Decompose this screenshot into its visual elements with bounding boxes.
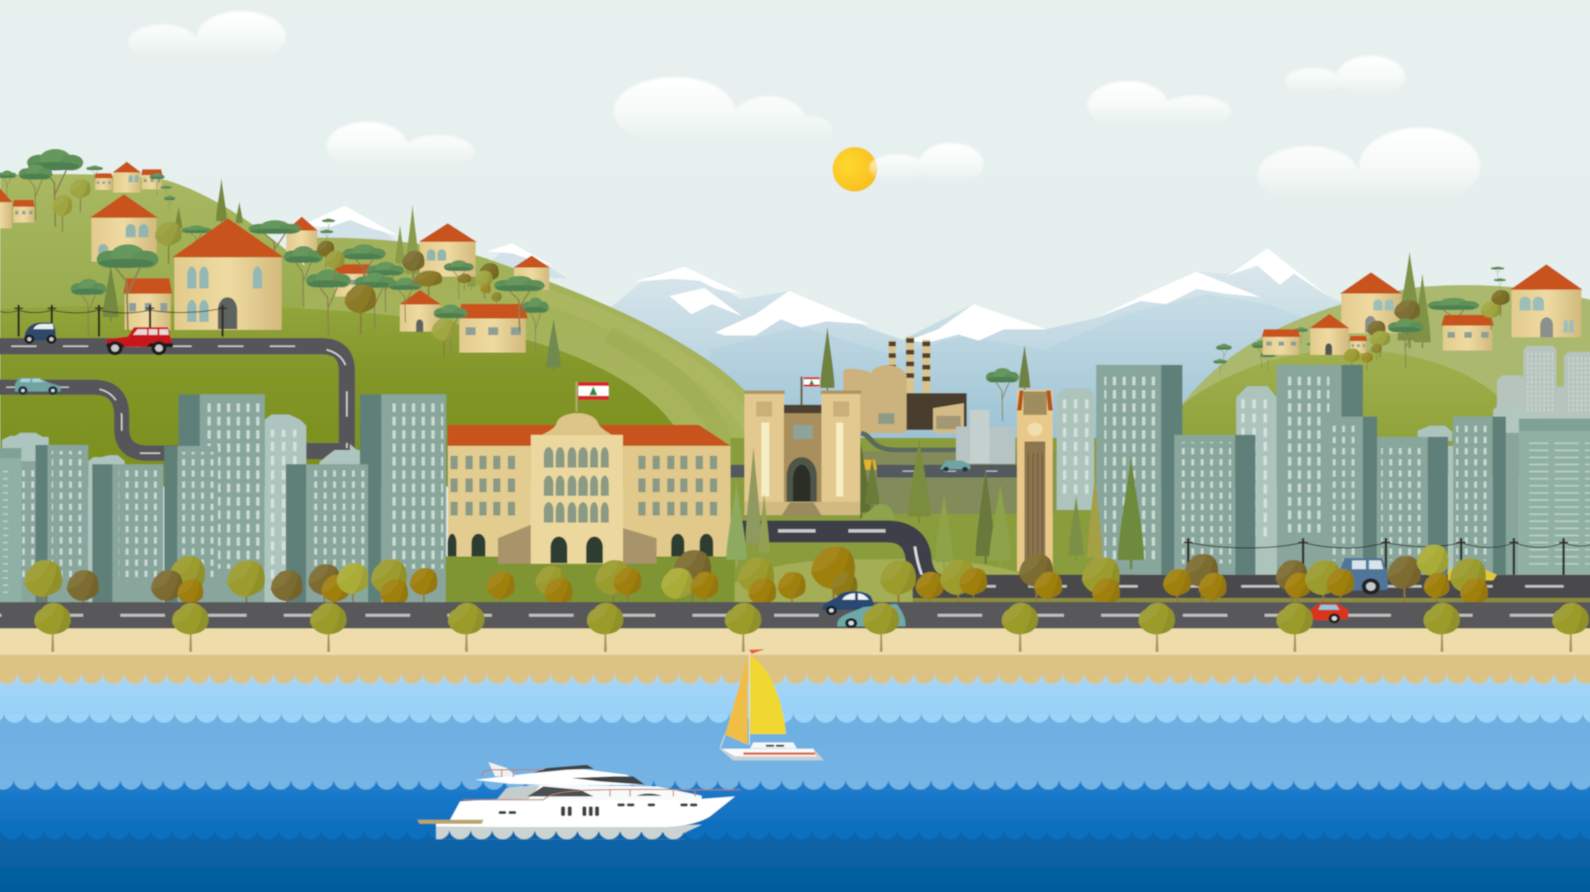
main round tower house xyxy=(71,218,284,337)
yellow car xyxy=(1448,570,1497,580)
green block tower xyxy=(0,448,21,602)
ground behind the central landmarks xyxy=(720,438,1136,605)
power line poles xyxy=(0,305,227,337)
mountains with snow caps xyxy=(302,206,1440,487)
second road on the right xyxy=(913,575,1590,602)
left hills xyxy=(0,174,791,487)
distant pale buildings on the hill xyxy=(1493,346,1590,440)
tower R3 xyxy=(1277,365,1363,575)
cars on the second road xyxy=(1312,558,1497,594)
central block with dome xyxy=(531,413,623,564)
factory halls xyxy=(843,365,967,450)
tower R2 xyxy=(1174,435,1255,575)
lower cabin xyxy=(497,785,702,800)
sailboat xyxy=(719,649,824,760)
fly bridge xyxy=(475,768,645,785)
museum main body xyxy=(744,391,861,516)
radar fin xyxy=(488,762,517,776)
small blue car xyxy=(24,323,56,344)
front coastal road xyxy=(0,602,1590,628)
side stairs xyxy=(498,525,657,564)
tower R1 xyxy=(1096,365,1182,575)
distant grey buildings xyxy=(956,410,1015,464)
sea layers xyxy=(0,673,1590,892)
firs by the right city xyxy=(1069,456,1144,569)
foreground hillside trees xyxy=(1344,290,1510,372)
tower D xyxy=(164,446,218,602)
tower R4 xyxy=(1323,417,1377,575)
back road with small car xyxy=(731,460,1017,477)
wings xyxy=(448,446,731,556)
striped chimneys xyxy=(889,337,930,393)
tower R6 xyxy=(1448,417,1506,575)
national museum xyxy=(744,377,861,516)
green lawn xyxy=(446,556,734,603)
motor yacht xyxy=(417,762,740,839)
umbrella pines behind the tower xyxy=(0,149,335,270)
sky background xyxy=(0,0,1590,487)
portholes xyxy=(499,803,697,816)
factory complex xyxy=(731,327,1050,586)
hull scalloped waterline xyxy=(436,829,685,839)
central fir trees xyxy=(851,438,1011,568)
tower R5 xyxy=(1377,437,1448,575)
pale background towers xyxy=(2,415,360,602)
cypress and pines behind houses xyxy=(1213,252,1506,376)
cars on the front road xyxy=(822,591,906,628)
red car on the right xyxy=(1311,603,1348,623)
railings xyxy=(463,770,740,800)
swim platform xyxy=(417,820,483,824)
curving dark road xyxy=(742,531,1050,586)
firs beside the museum xyxy=(726,447,770,566)
road behind the left city xyxy=(0,346,347,453)
pale background towers xyxy=(1057,386,1452,575)
tower B xyxy=(92,464,163,602)
right hills xyxy=(1181,285,1590,476)
blue SUV xyxy=(1312,558,1388,594)
right hillside village xyxy=(1213,252,1590,440)
clouds xyxy=(129,11,1480,180)
hull xyxy=(436,825,702,832)
tower A xyxy=(21,445,88,602)
museum flag xyxy=(801,377,819,407)
tiled roof xyxy=(448,425,731,446)
clock tower xyxy=(1017,345,1053,571)
umbrella pine by the clock tower xyxy=(986,368,1019,421)
front row of trees xyxy=(34,602,1589,652)
teal car xyxy=(837,604,906,628)
hillside houses xyxy=(1262,264,1583,355)
right city skyline xyxy=(1057,365,1590,575)
parliament building xyxy=(446,382,734,603)
back row of trees xyxy=(24,544,1488,626)
hillside houses xyxy=(0,162,550,297)
power lines on the right xyxy=(1184,538,1590,575)
teal car xyxy=(15,378,61,395)
left city skyline xyxy=(0,394,446,602)
tower G xyxy=(360,394,446,602)
tower C xyxy=(178,394,265,602)
tower R7 and green block xyxy=(1506,419,1590,575)
car: red SUV and hillside cars xyxy=(15,323,173,395)
tower F xyxy=(286,464,368,602)
background cypress trees xyxy=(175,178,476,290)
right village houses and trees xyxy=(284,240,561,372)
beach sand xyxy=(0,628,1590,675)
sun xyxy=(833,147,877,192)
Lebanese flag on dome xyxy=(575,382,609,412)
red SUV xyxy=(106,327,173,355)
dark blue car xyxy=(822,591,874,615)
left hillside village xyxy=(0,149,561,372)
